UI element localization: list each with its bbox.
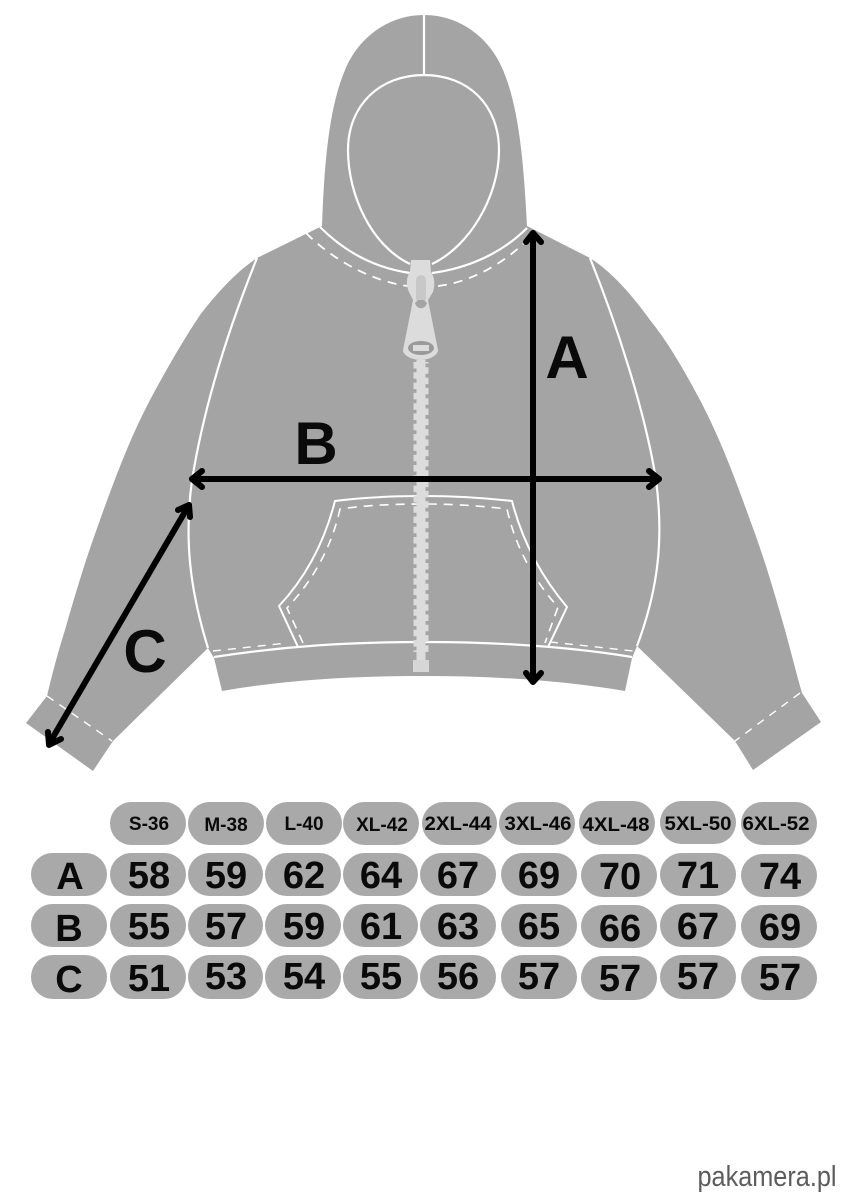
row C: 56	[437, 956, 479, 998]
row A: 62	[283, 855, 325, 897]
hood seams	[306, 15, 535, 286]
arrow C: sleeve length	[48, 505, 190, 745]
header row: sizes: 4XL-48	[582, 815, 650, 836]
label B: B	[294, 410, 338, 477]
row A: 70	[599, 856, 641, 898]
row B: 63	[437, 906, 479, 948]
arrow B: chest width	[192, 471, 659, 487]
header row: sizes	[110, 801, 817, 845]
row B: 59	[283, 906, 325, 948]
row B: 67	[677, 906, 719, 948]
label A: A	[545, 324, 589, 391]
row B: 61	[360, 906, 402, 948]
hoodie illustration	[26, 15, 821, 771]
row A: 58	[128, 855, 170, 897]
header row: sizes: M-38	[204, 815, 248, 836]
row A: 74	[759, 856, 801, 898]
row C: 57	[599, 958, 641, 1000]
row A: 71	[677, 855, 719, 897]
row C: 55	[360, 956, 402, 998]
row A: A	[56, 856, 84, 898]
header row: sizes: S-36	[129, 814, 169, 835]
zipper	[403, 260, 438, 672]
row A	[31, 853, 817, 898]
row B: B	[55, 908, 83, 950]
row B: 55	[128, 906, 170, 948]
row C: 53	[205, 956, 247, 998]
row A: 64	[360, 855, 402, 897]
header row: sizes: 5XL-50	[664, 814, 732, 835]
row C: 57	[518, 956, 560, 998]
row C	[31, 955, 817, 1001]
row B: 65	[518, 906, 560, 948]
row C: C	[55, 959, 83, 1001]
zipper pull	[403, 260, 438, 360]
row A: 69	[518, 855, 560, 897]
zipper teeth	[416, 360, 426, 665]
size table	[31, 801, 817, 1001]
hoodie silhouette	[26, 15, 821, 771]
row C: 54	[283, 956, 325, 998]
row B: 66	[599, 908, 641, 950]
arrow A: length	[526, 233, 541, 682]
header row: sizes: XL-42	[356, 815, 408, 836]
row C: 51	[128, 958, 170, 1000]
label C: C	[123, 618, 167, 685]
zipper bottom stop	[413, 660, 429, 672]
row A: 67	[437, 855, 479, 897]
row B: 69	[759, 907, 801, 949]
row C: 57	[759, 957, 801, 999]
header row: sizes: 2XL-44	[424, 814, 492, 835]
header row: sizes: 6XL-52	[742, 814, 810, 835]
row C: 57	[677, 956, 719, 998]
kangaroo pocket	[279, 496, 567, 647]
header row: sizes: 3XL-46	[504, 814, 572, 835]
header row: sizes: L-40	[284, 814, 324, 835]
row B: 57	[205, 906, 247, 948]
row B	[31, 904, 817, 950]
row A: 59	[205, 855, 247, 897]
sleeve and hem seams	[47, 258, 800, 741]
